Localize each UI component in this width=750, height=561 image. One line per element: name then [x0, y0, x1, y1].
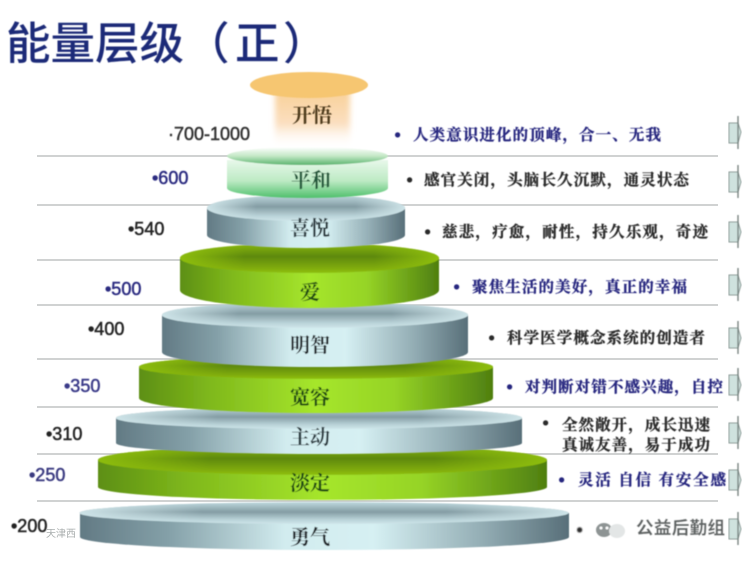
description: 淡定: 灵活 自信 有安全感	[578, 470, 727, 489]
icon: tab 8	[729, 463, 741, 496]
disc: 宽容	[139, 355, 493, 413]
description: 平和: 感官关闭，头脑长久沉默，通灵状态	[424, 170, 690, 190]
description: 主动	[543, 415, 710, 455]
disc: 开悟: 开悟	[292, 104, 332, 127]
disc: 明智	[162, 302, 468, 367]
icon: tab 3	[729, 215, 741, 248]
description: 宽容: 对判断对错不感兴趣，自控	[525, 377, 723, 397]
descriptions	[395, 125, 727, 539]
disc: 平和: 平和	[291, 169, 331, 192]
disc: 喜悦	[207, 195, 405, 248]
level values: •200	[11, 516, 47, 536]
disc: 勇气: 勇气	[290, 526, 330, 549]
title: ）	[283, 20, 328, 69]
description: 勇气 bullet: •	[577, 522, 582, 539]
title: 正	[235, 20, 280, 69]
icon: wechat watermark	[596, 523, 625, 538]
description: 平和: •	[407, 172, 412, 189]
description: 爱: 聚焦生活的美好，真正的幸福	[472, 277, 687, 297]
level values: •250	[29, 465, 65, 485]
icon: tab 7	[729, 416, 741, 449]
description: 开悟: 人类意识进化的顶峰，合一、无我	[413, 125, 661, 145]
level values	[11, 124, 250, 536]
disc: 宽容: 宽容	[290, 385, 330, 409]
icon: tab 5	[729, 321, 741, 354]
horizontal divider lines	[37, 156, 718, 501]
side tab icons	[729, 116, 741, 545]
title: 能量层级	[6, 20, 184, 69]
description: 主动: •	[543, 415, 548, 432]
level values: •500	[105, 279, 141, 299]
disc: 爱	[180, 243, 439, 308]
disc: 平和	[227, 147, 388, 198]
description: 淡定: •	[559, 472, 564, 489]
level values: ·700-1000	[168, 124, 250, 144]
disc: 开悟	[250, 72, 368, 148]
disc: 淡定	[98, 445, 547, 500]
icon: tab 2	[729, 165, 741, 198]
level values: •350	[64, 376, 100, 396]
level values: •540	[128, 219, 164, 239]
disc: 淡定: 淡定	[290, 472, 330, 495]
description: 爱: •	[454, 279, 459, 296]
description: 主动: 全然敞开，成长迅速	[562, 415, 710, 435]
description: 明智: 科学医学概念系统的创造者	[507, 328, 705, 347]
watermark text: 公益后勤组	[636, 518, 725, 538]
description: 开悟: •	[395, 127, 400, 144]
description: 喜悦: 慈悲，疗愈，耐性，持久乐观，奇迹	[442, 222, 709, 242]
icon: tab 4	[729, 268, 741, 301]
icon: tab 1	[729, 116, 741, 149]
disc: 勇气	[80, 502, 569, 550]
disc: 明智: 明智	[290, 334, 330, 357]
description: 明智: •	[489, 330, 494, 347]
description: 宽容: •	[507, 379, 512, 396]
level values: •400	[88, 319, 124, 339]
icon: tab 9	[729, 512, 741, 545]
level values: •310	[46, 424, 82, 444]
small source watermark: 天津西	[46, 528, 76, 540]
disc: 喜悦: 喜悦	[290, 217, 330, 240]
disc: 爱: 爱	[299, 281, 320, 304]
disc: 主动: 主动	[290, 426, 330, 449]
icon: tab 6	[729, 368, 741, 401]
description: 喜悦: •	[425, 224, 430, 241]
disc: 主动	[116, 407, 522, 454]
title: （	[185, 20, 230, 69]
level values: •600	[152, 168, 188, 188]
description: 主动: 真诚友善，易于成功	[562, 435, 710, 455]
